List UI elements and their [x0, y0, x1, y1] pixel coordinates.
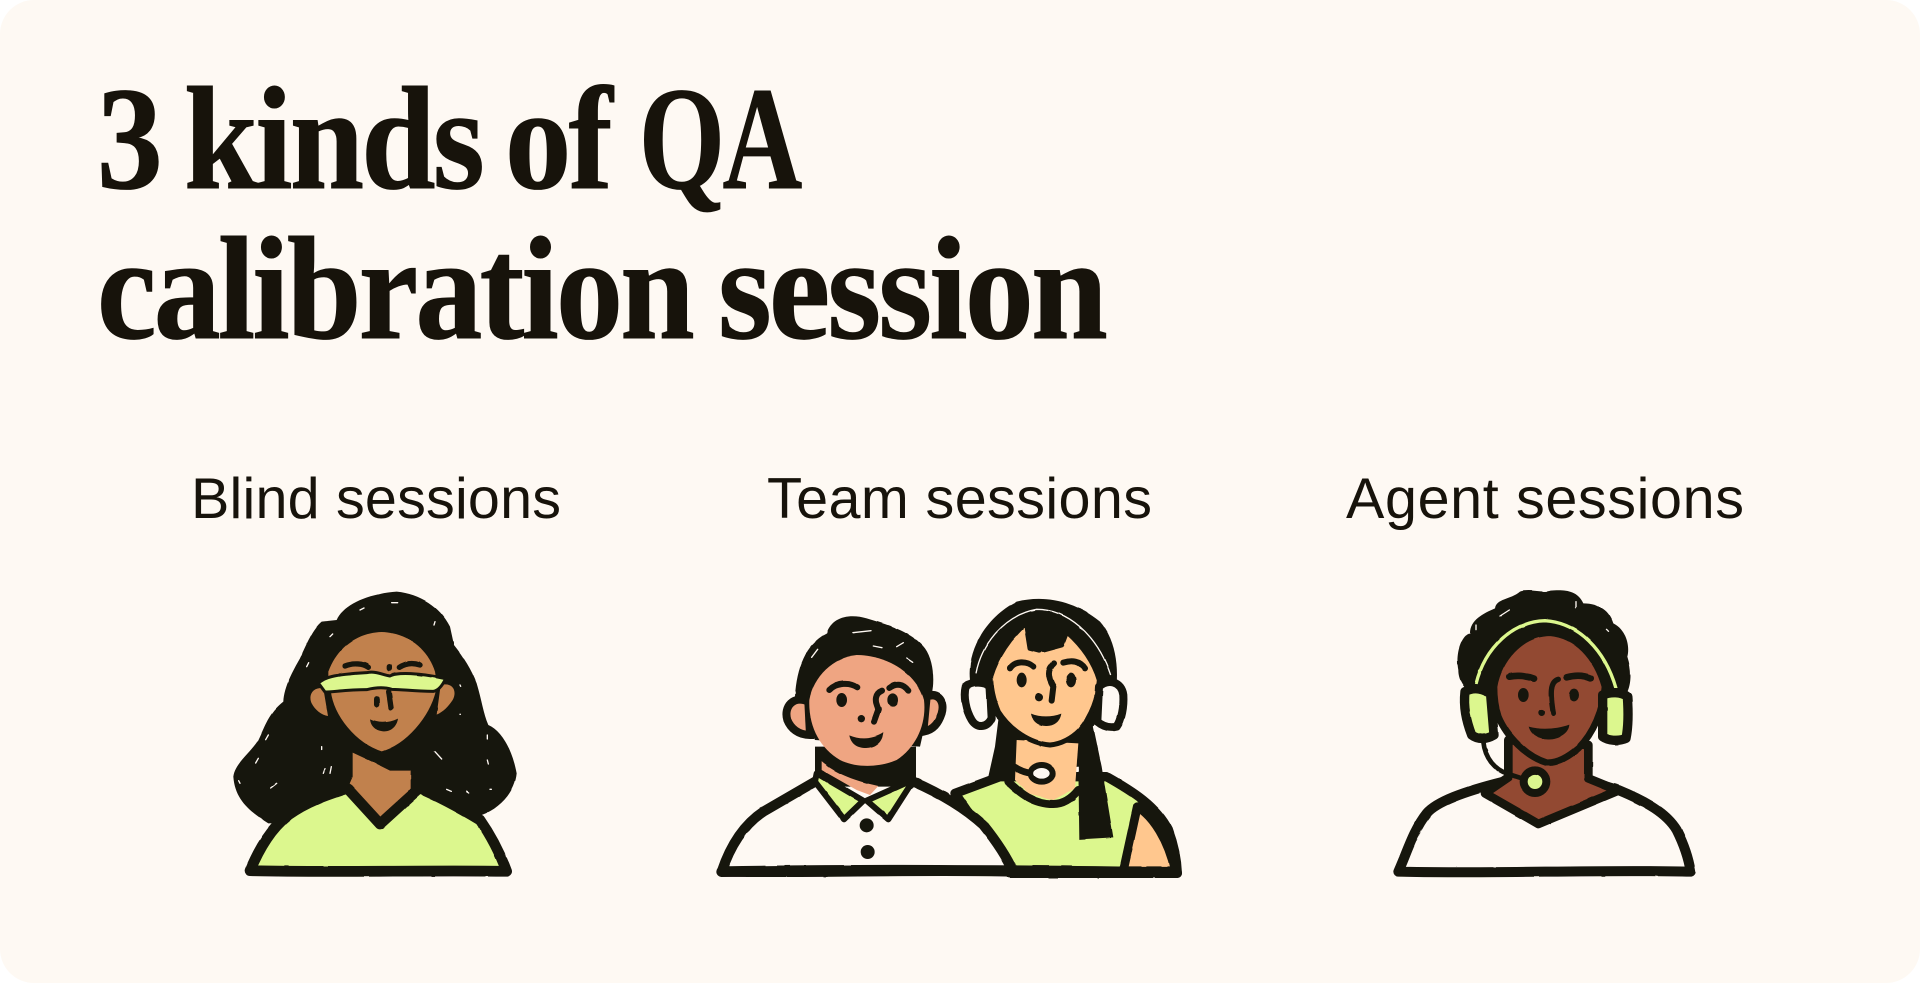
man hair [795, 616, 933, 747]
neck [348, 753, 411, 822]
face [328, 632, 438, 754]
neck and chest [1485, 740, 1618, 824]
hair highlights [812, 631, 913, 662]
visor [319, 672, 446, 692]
title: calibration [97, 207, 693, 370]
icon: team of two people [722, 599, 1177, 873]
left earcup [1465, 689, 1494, 739]
heading: agent sessions: Agent sessions [1346, 467, 1744, 531]
ears [786, 695, 943, 735]
woman face [991, 623, 1099, 745]
left earcup [965, 683, 992, 726]
mic wire [1012, 765, 1032, 773]
hair speckles [239, 603, 491, 793]
heading: blind sessions: Blind sessions [191, 467, 561, 531]
title: of [505, 57, 615, 220]
woman hair back [970, 599, 1117, 839]
icon: agent with headset [1398, 590, 1691, 872]
heading: team sessions: Team sessions [767, 467, 1152, 531]
shirt [1398, 782, 1691, 872]
title: QA [639, 57, 802, 220]
hair highlights [1476, 602, 1608, 631]
man features [829, 684, 908, 722]
headband highlight [976, 609, 1111, 675]
headband [1476, 621, 1616, 688]
neck shadow [353, 742, 413, 771]
face [1494, 633, 1605, 763]
title [97, 57, 1106, 370]
mic [1524, 770, 1546, 793]
icon: blindfolded woman [233, 592, 517, 871]
right earcup [1097, 682, 1123, 727]
brows, nose, mouth [345, 663, 420, 708]
title: session [718, 207, 1106, 370]
features [1509, 676, 1591, 679]
neck [1015, 740, 1078, 800]
mic wire [1483, 742, 1525, 779]
man collar [815, 773, 914, 819]
man face [809, 655, 924, 766]
ears [310, 684, 455, 716]
hair [233, 592, 517, 823]
mic [1031, 765, 1053, 782]
base line [722, 870, 1177, 873]
woman body [955, 777, 1177, 873]
hair [1457, 590, 1631, 693]
title: kinds [184, 57, 482, 220]
title: 3 [97, 57, 160, 220]
jaw shadow [328, 692, 438, 754]
right earcup [1603, 693, 1628, 740]
man neck [815, 747, 916, 782]
neckline [1008, 782, 1078, 804]
woman arm [1123, 807, 1175, 871]
woman features [1010, 661, 1085, 701]
man shirt [722, 782, 1013, 872]
buttons [860, 818, 874, 832]
shirt [250, 788, 507, 871]
